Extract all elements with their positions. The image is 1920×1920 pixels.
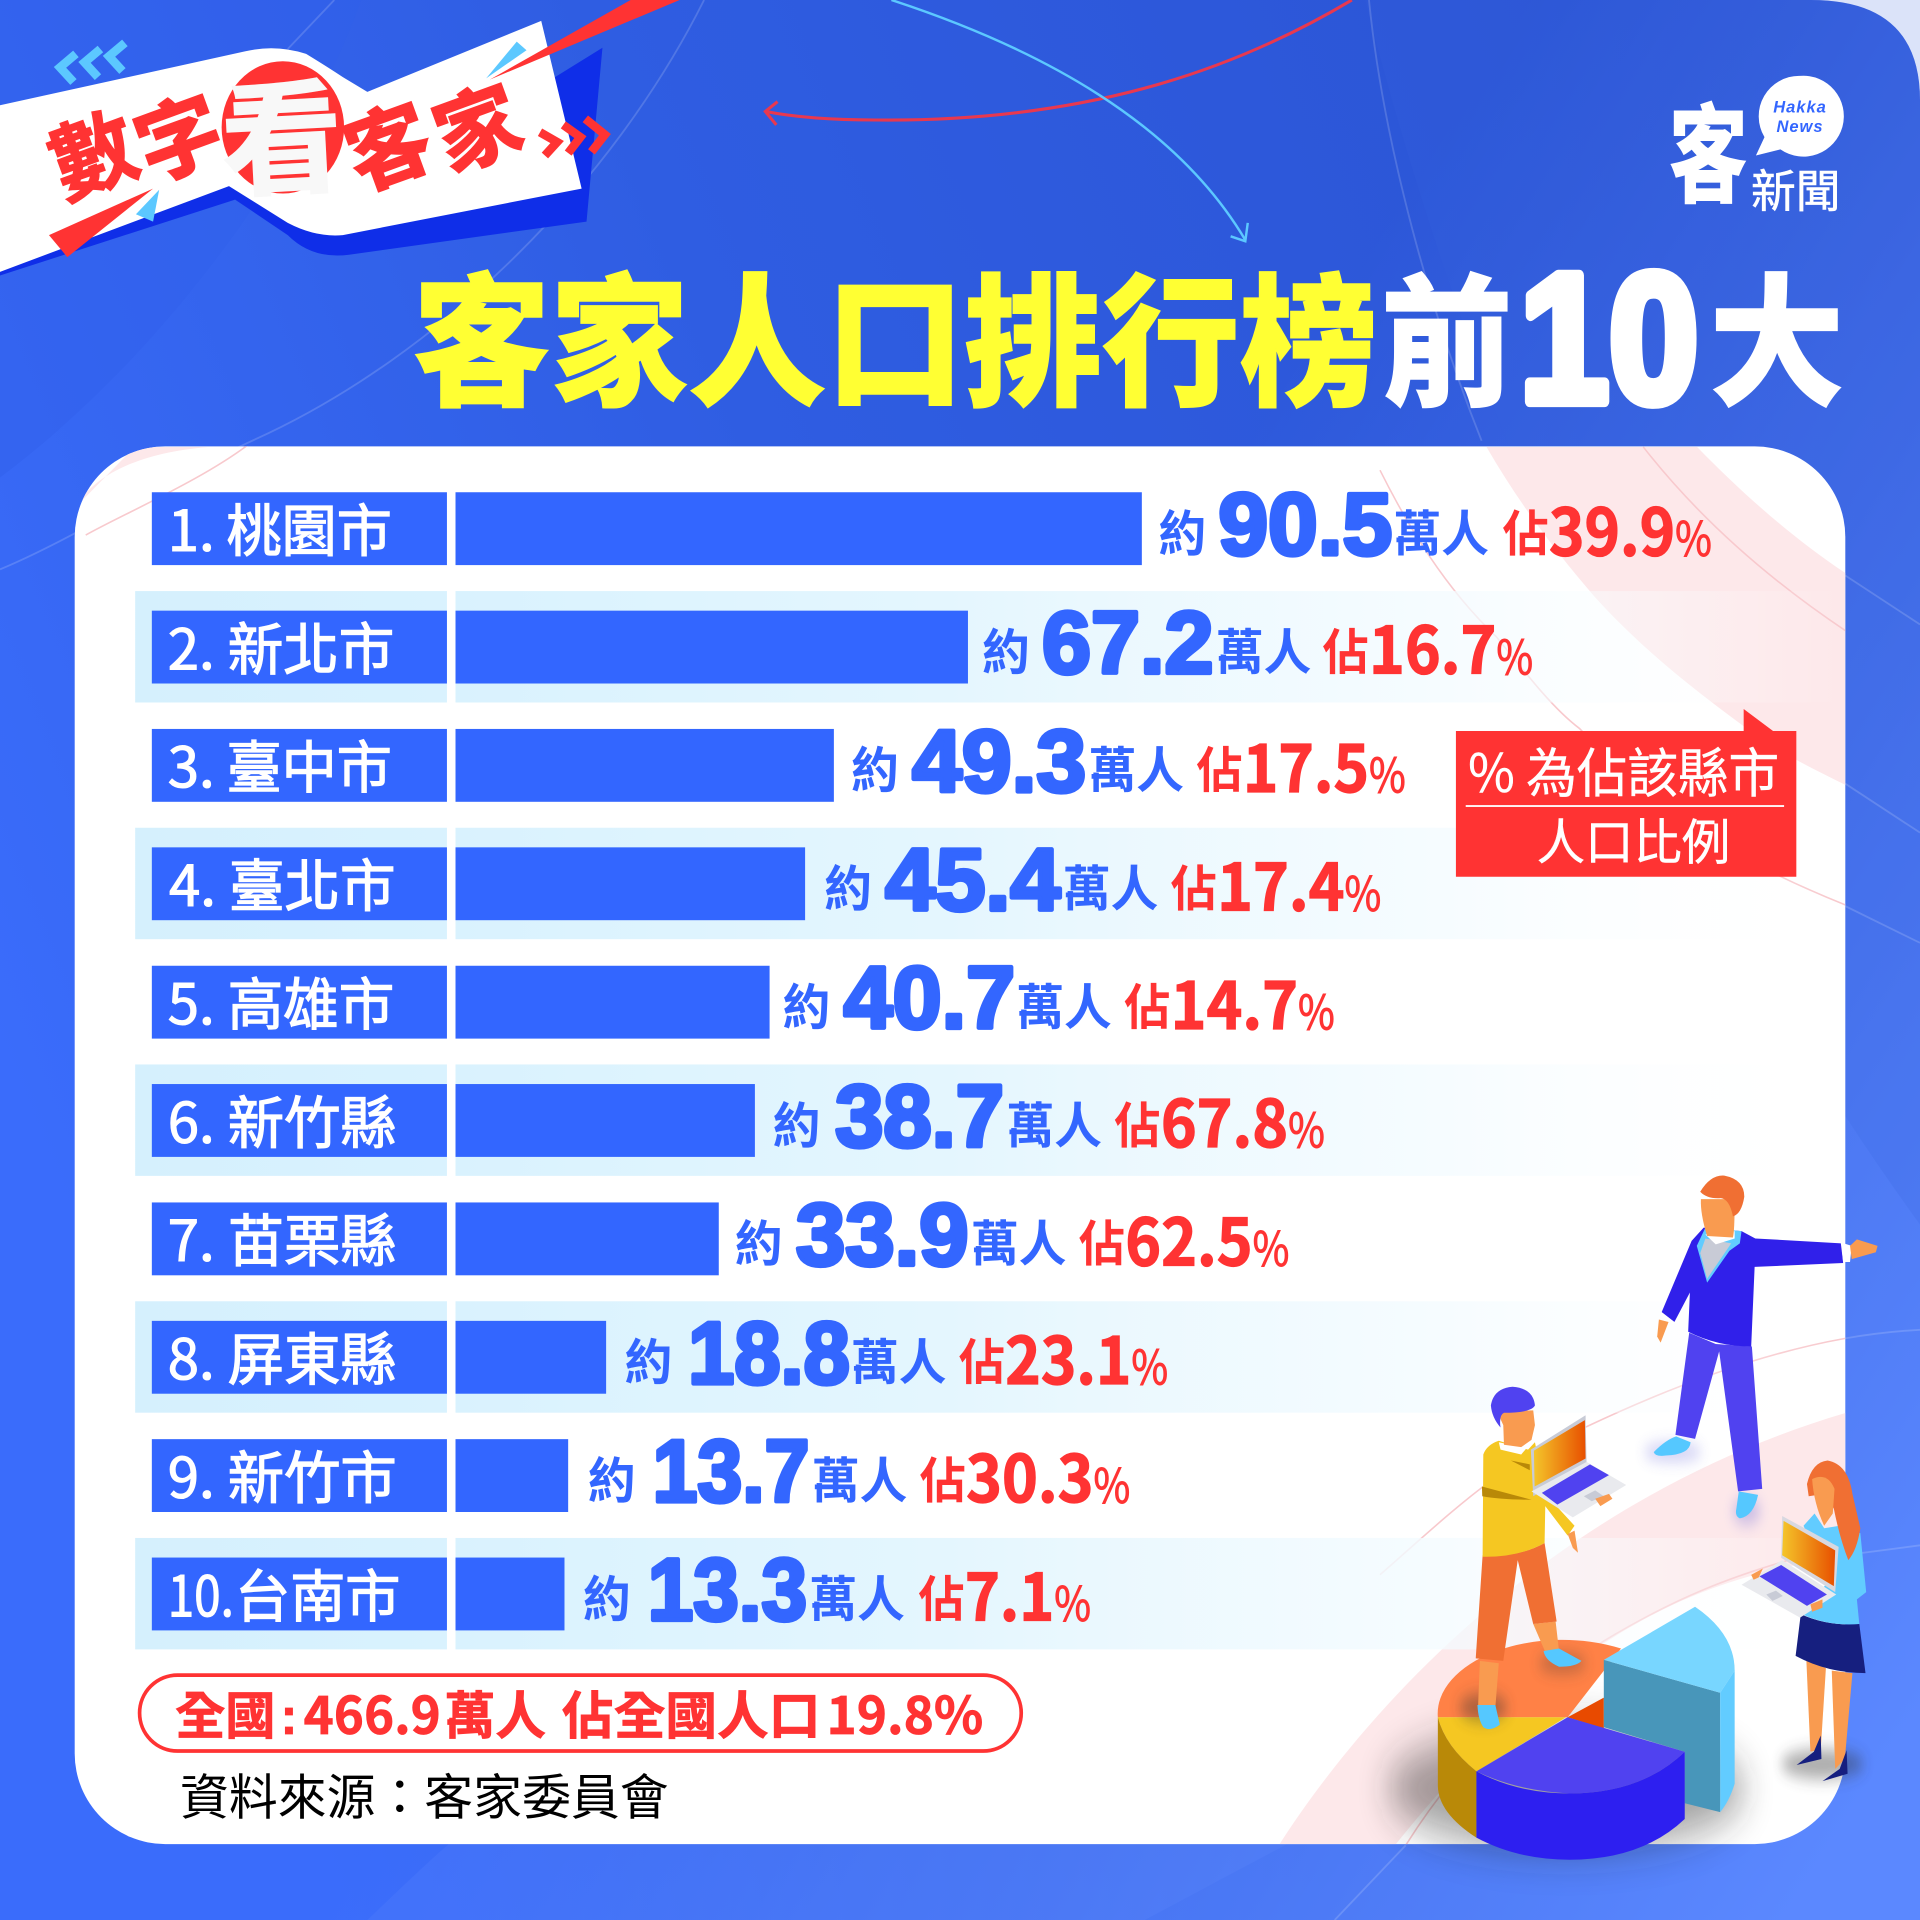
row 5 高雄市: 40.7 xyxy=(844,948,1015,1047)
row 8 屏東縣: 萬人 xyxy=(851,1324,947,1395)
row 9 新竹市: 30.3 xyxy=(966,1427,1093,1521)
row 8 屏東縣: 佔 xyxy=(959,1324,1005,1395)
row 6 新竹縣: 約 xyxy=(773,1087,820,1158)
row 8 屏東縣: 8. xyxy=(168,1316,215,1397)
row 4 臺北市: 4. xyxy=(169,842,216,923)
row 2 新北市: 約 xyxy=(982,613,1030,684)
row 2 新北市: 佔 xyxy=(1322,613,1369,684)
row 7 苗栗縣: 佔 xyxy=(1079,1205,1125,1276)
title white 10: 10 xyxy=(1520,236,1698,441)
row 1 桃園市: 桃園市 xyxy=(227,487,392,568)
logo: 客新聞 Hakka News xyxy=(1669,71,1844,225)
white panel xyxy=(75,440,1845,1845)
row 9 新竹市: % xyxy=(1093,1448,1130,1517)
row 10 台南市: 萬人 xyxy=(809,1560,905,1631)
word 客家: 家 xyxy=(414,50,537,196)
word 看: 看 xyxy=(216,40,347,223)
ranking chart xyxy=(135,475,1845,1649)
row 10 台南市: 佔 xyxy=(918,1560,965,1631)
spike blue bottom xyxy=(136,190,159,222)
row 3 臺中市: % xyxy=(1369,738,1406,807)
row 6 新竹縣: 新竹縣 xyxy=(228,1079,397,1160)
新聞: 新聞 xyxy=(1751,155,1840,220)
decorative arc arrow blue xyxy=(891,0,1248,241)
row 1 桃園市: 萬人 xyxy=(1393,495,1489,566)
Hakka News text: Hakka xyxy=(1773,98,1827,117)
row 5 高雄市: 14.7 xyxy=(1171,954,1298,1048)
row 3 臺中市: 萬人 xyxy=(1089,732,1184,803)
laptop 2 xyxy=(1742,1516,1839,1618)
chevrons right xyxy=(540,119,605,156)
row 6 新竹縣: % xyxy=(1288,1093,1325,1162)
man in suit xyxy=(1643,1176,1878,1525)
row 5 高雄市: 高雄市 xyxy=(228,961,394,1042)
pie shadow xyxy=(1387,1727,1745,1850)
callout: percent note xyxy=(1456,709,1796,877)
word 客家: 客 xyxy=(325,69,448,214)
row 7 苗栗縣 xyxy=(152,1185,1289,1285)
word 數字 xyxy=(30,60,239,223)
word 數字: 字 xyxy=(116,60,239,206)
row 4 臺北市: 佔 xyxy=(1171,850,1217,921)
row 9 新竹市: 9. xyxy=(168,1434,215,1515)
row 7 苗栗縣: 62.5 xyxy=(1125,1191,1253,1285)
row 3 臺中市: 3. xyxy=(168,724,215,805)
row 8 屏東縣 xyxy=(135,1301,1845,1413)
row 9 新竹市: 佔 xyxy=(920,1442,966,1513)
title white 前: 前 xyxy=(1381,229,1512,436)
row 1 桃園市: 約 xyxy=(1158,495,1206,566)
banner shadow xyxy=(0,48,602,276)
row 4 臺北市: 17.4 xyxy=(1217,835,1344,929)
spike red bottom xyxy=(49,189,153,257)
row 10 台南市: 7.1 xyxy=(965,1546,1054,1640)
row 3 臺中市: 佔 xyxy=(1196,732,1243,803)
row 4 臺北市 xyxy=(135,828,1845,939)
row 10 台南市: 約 xyxy=(583,1560,631,1631)
row 5 高雄市 xyxy=(152,948,1335,1048)
row 8 屏東縣: 屏東縣 xyxy=(228,1316,397,1397)
title white 大: 大 xyxy=(1709,229,1844,436)
word 客家 xyxy=(325,50,537,214)
chevrons left xyxy=(60,43,125,82)
speech bubble xyxy=(1756,76,1844,157)
row 1 桃園市: 1. xyxy=(168,487,215,568)
row 7 苗栗縣: 約 xyxy=(735,1205,782,1276)
row 8 屏東縣: 18.8 xyxy=(688,1303,850,1402)
row 6 新竹縣: 佔 xyxy=(1114,1087,1161,1158)
Hakka News text: News xyxy=(1776,117,1824,136)
row 2 新北市: % xyxy=(1496,619,1533,688)
row 4 臺北市: % xyxy=(1344,856,1381,925)
decorative arc arrow red xyxy=(765,0,1352,125)
row 6 新竹縣 xyxy=(135,1064,1845,1176)
row 3 臺中市: 臺中市 xyxy=(227,724,392,805)
row 9 新竹市 xyxy=(152,1422,1130,1521)
banner white ribbon xyxy=(0,21,582,272)
word 數字: 數 xyxy=(30,77,153,223)
row 7 苗栗縣: % xyxy=(1253,1211,1289,1280)
Hakka News text xyxy=(1773,98,1827,136)
row 2 新北市: 67.2 xyxy=(1042,593,1213,692)
illustration: people and pie chart xyxy=(1387,1176,1878,1860)
boy with laptop xyxy=(1459,1387,1626,1729)
row 8 屏東縣: 約 xyxy=(624,1324,672,1395)
row 6 新竹縣: 萬人 xyxy=(1007,1087,1102,1158)
row 2 新北市 xyxy=(135,591,1845,702)
row 1 桃園市: 佔 xyxy=(1502,495,1549,566)
large 客: 客 xyxy=(1669,71,1748,225)
row 5 高雄市: % xyxy=(1298,974,1335,1043)
row 8 屏東縣: % xyxy=(1131,1330,1168,1399)
title yellow: 客家人口排行榜 xyxy=(413,229,1378,436)
spike blue top xyxy=(486,42,527,78)
row 6 新竹縣: 67.8 xyxy=(1161,1072,1288,1166)
row 3 臺中市: 49.3 xyxy=(912,711,1086,810)
row 1 桃園市: 39.9 xyxy=(1549,480,1675,574)
row 2 新北市: 萬人 xyxy=(1216,613,1311,684)
row 7 苗栗縣: 萬人 xyxy=(971,1205,1067,1276)
spike red top xyxy=(490,0,680,80)
row 2 新北市: 新北市 xyxy=(228,605,394,686)
national total pill xyxy=(140,1674,1021,1751)
row 9 新竹市: 新竹市 xyxy=(228,1434,397,1515)
title xyxy=(413,229,1844,441)
row 4 臺北市: 約 xyxy=(824,850,872,921)
row 10 台南市: 10. xyxy=(168,1552,234,1633)
national total pill: 全國 xyxy=(175,1674,276,1749)
woman with laptop xyxy=(1742,1460,1866,1781)
national total pill: : xyxy=(280,1687,298,1745)
row 9 新竹市: 13.7 xyxy=(653,1422,809,1521)
row 7 苗栗縣: 7. xyxy=(168,1197,215,1278)
row 5 高雄市: 5. xyxy=(168,961,215,1042)
row 9 新竹市: 約 xyxy=(588,1442,636,1513)
national total pill: 萬人 xyxy=(444,1674,546,1749)
row 5 高雄市: 約 xyxy=(782,969,830,1040)
row 1 桃園市 xyxy=(152,475,1712,574)
row 4 臺北市: 45.4 xyxy=(885,830,1060,929)
row 10 台南市: 台南市 xyxy=(235,1552,400,1633)
row 3 臺中市: 約 xyxy=(851,732,899,803)
row 10 台南市: 13.3 xyxy=(648,1540,807,1639)
row 3 臺中市 xyxy=(152,711,1406,811)
red circle behind 看 xyxy=(222,61,344,193)
callout: percent note: % 為佔該縣市 xyxy=(1468,732,1779,808)
national total pill: 466.9 xyxy=(304,1674,441,1749)
national total pill: 佔全國人口 xyxy=(562,1674,820,1749)
row 2 新北市: 16.7 xyxy=(1369,599,1496,693)
row 8 屏東縣: 23.1 xyxy=(1005,1309,1131,1403)
callout: percent note: 人口比例 xyxy=(1537,804,1730,875)
row 6 新竹縣: 6. xyxy=(168,1079,215,1160)
row 10 台南市: % xyxy=(1054,1566,1091,1635)
row 5 高雄市: 佔 xyxy=(1124,969,1171,1040)
row 7 苗栗縣: 33.9 xyxy=(796,1185,969,1284)
banner: 數字看客家 xyxy=(0,0,680,276)
row 10 台南市 xyxy=(135,1538,1845,1649)
row 4 臺北市: 臺北市 xyxy=(229,842,396,923)
source: 資料來源：客家委員會 xyxy=(180,1759,669,1830)
row 5 高雄市: 萬人 xyxy=(1016,969,1112,1040)
row 4 臺北市: 萬人 xyxy=(1063,850,1158,921)
row 9 新竹市: 萬人 xyxy=(812,1442,907,1513)
row 2 新北市: 2. xyxy=(168,605,215,686)
row 1 桃園市: 90.5 xyxy=(1218,475,1392,574)
laptop 1 xyxy=(1531,1415,1626,1517)
row 1 桃園市: % xyxy=(1675,501,1712,570)
row 6 新竹縣: 38.7 xyxy=(835,1066,1004,1165)
national total pill: 19.8% xyxy=(827,1674,983,1749)
row 3 臺中市: 17.5 xyxy=(1243,717,1369,811)
row 7 苗栗縣: 苗栗縣 xyxy=(228,1197,397,1278)
pie chart xyxy=(1438,1607,1735,1860)
